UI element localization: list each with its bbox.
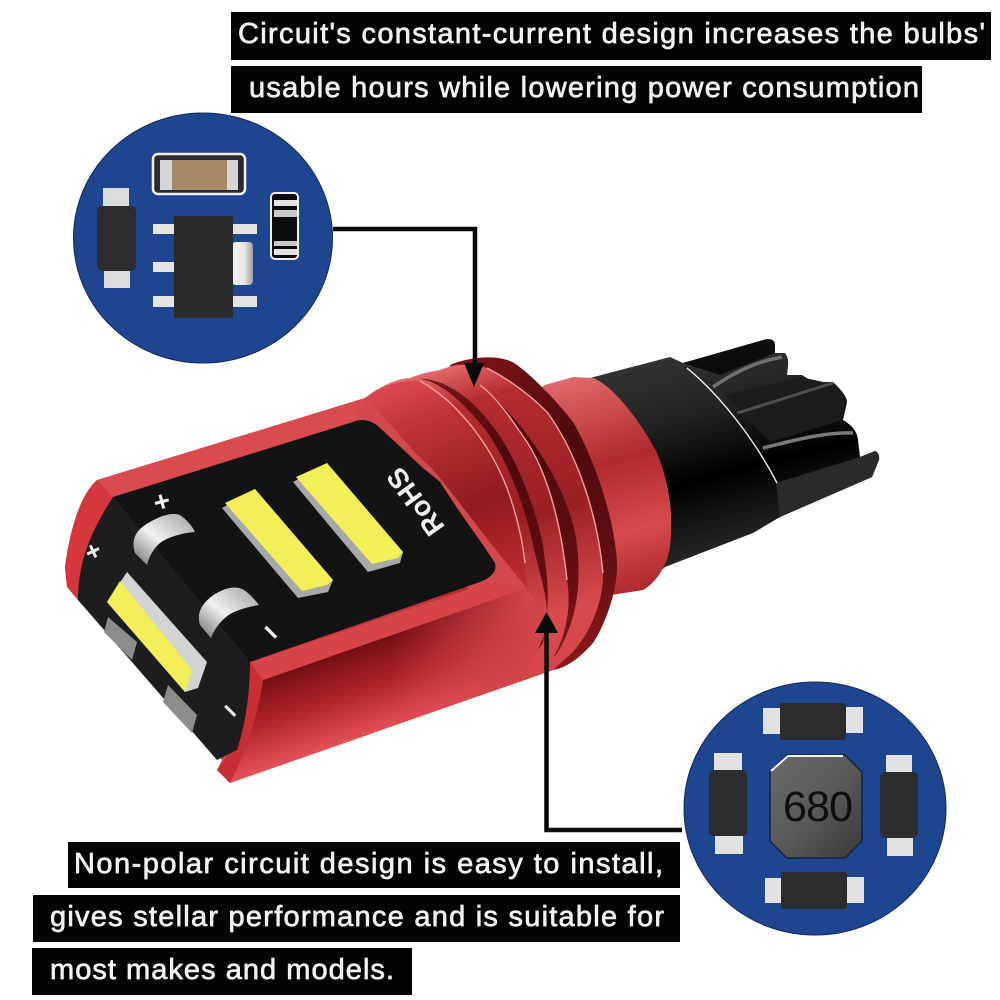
- LED strip 3 on end face: [107, 572, 207, 692]
- arrow: flange to lower circuit: [535, 612, 682, 830]
- left diode: [709, 753, 747, 854]
- top diode: [763, 703, 863, 740]
- lower side surface: [217, 583, 547, 783]
- end face: [78, 497, 250, 760]
- bulb: [65, 339, 879, 783]
- red neck: [530, 377, 671, 596]
- top caption: [231, 12, 991, 113]
- circuit circle: constant-current components: [74, 113, 332, 363]
- right diode: [880, 755, 918, 856]
- polarity marks: −: [214, 694, 247, 727]
- head body: [65, 378, 547, 783]
- bottom caption: most makes and models.: [50, 954, 394, 986]
- capacitor: [153, 154, 245, 194]
- top black face: [113, 420, 495, 662]
- rim left: [65, 480, 113, 600]
- metal clip lower: [199, 587, 259, 638]
- bottom caption: [32, 842, 680, 995]
- polarity marks: −: [252, 615, 288, 651]
- metal clip upper: [134, 514, 195, 565]
- polarity marks: [80, 484, 288, 727]
- LED strip 2: [293, 463, 403, 572]
- top caption: Circuit's constant-current design increases the bulbs': [238, 18, 985, 50]
- end face pads: [104, 617, 197, 733]
- dome disc: [365, 381, 527, 600]
- polarity marks: +: [80, 534, 106, 568]
- pink wedge beside top face: [340, 398, 527, 604]
- integrated circuit chip: [153, 216, 257, 318]
- bottom caption: Non-polar circuit design is easy to install,: [74, 848, 663, 880]
- flange rings: [410, 357, 617, 684]
- polarity marks: +: [150, 484, 174, 519]
- arrow: circuit to flange: [333, 229, 484, 387]
- black plastic base: [590, 339, 879, 590]
- circuit circle: non-polar components: [684, 682, 946, 935]
- left diode: [97, 188, 136, 288]
- LED strip 1: [222, 489, 333, 598]
- top red band: [97, 398, 365, 497]
- bottom caption: gives stellar performance and is suitable for: [50, 901, 664, 933]
- bottom diode: [765, 872, 864, 909]
- inductor marked 680: 680: [783, 783, 853, 831]
- inductor marked 680: [770, 755, 862, 858]
- RoHS mark: RoHS: [380, 462, 450, 542]
- top caption: usable hours while lowering power consumption: [249, 72, 919, 104]
- resistor: [271, 193, 298, 259]
